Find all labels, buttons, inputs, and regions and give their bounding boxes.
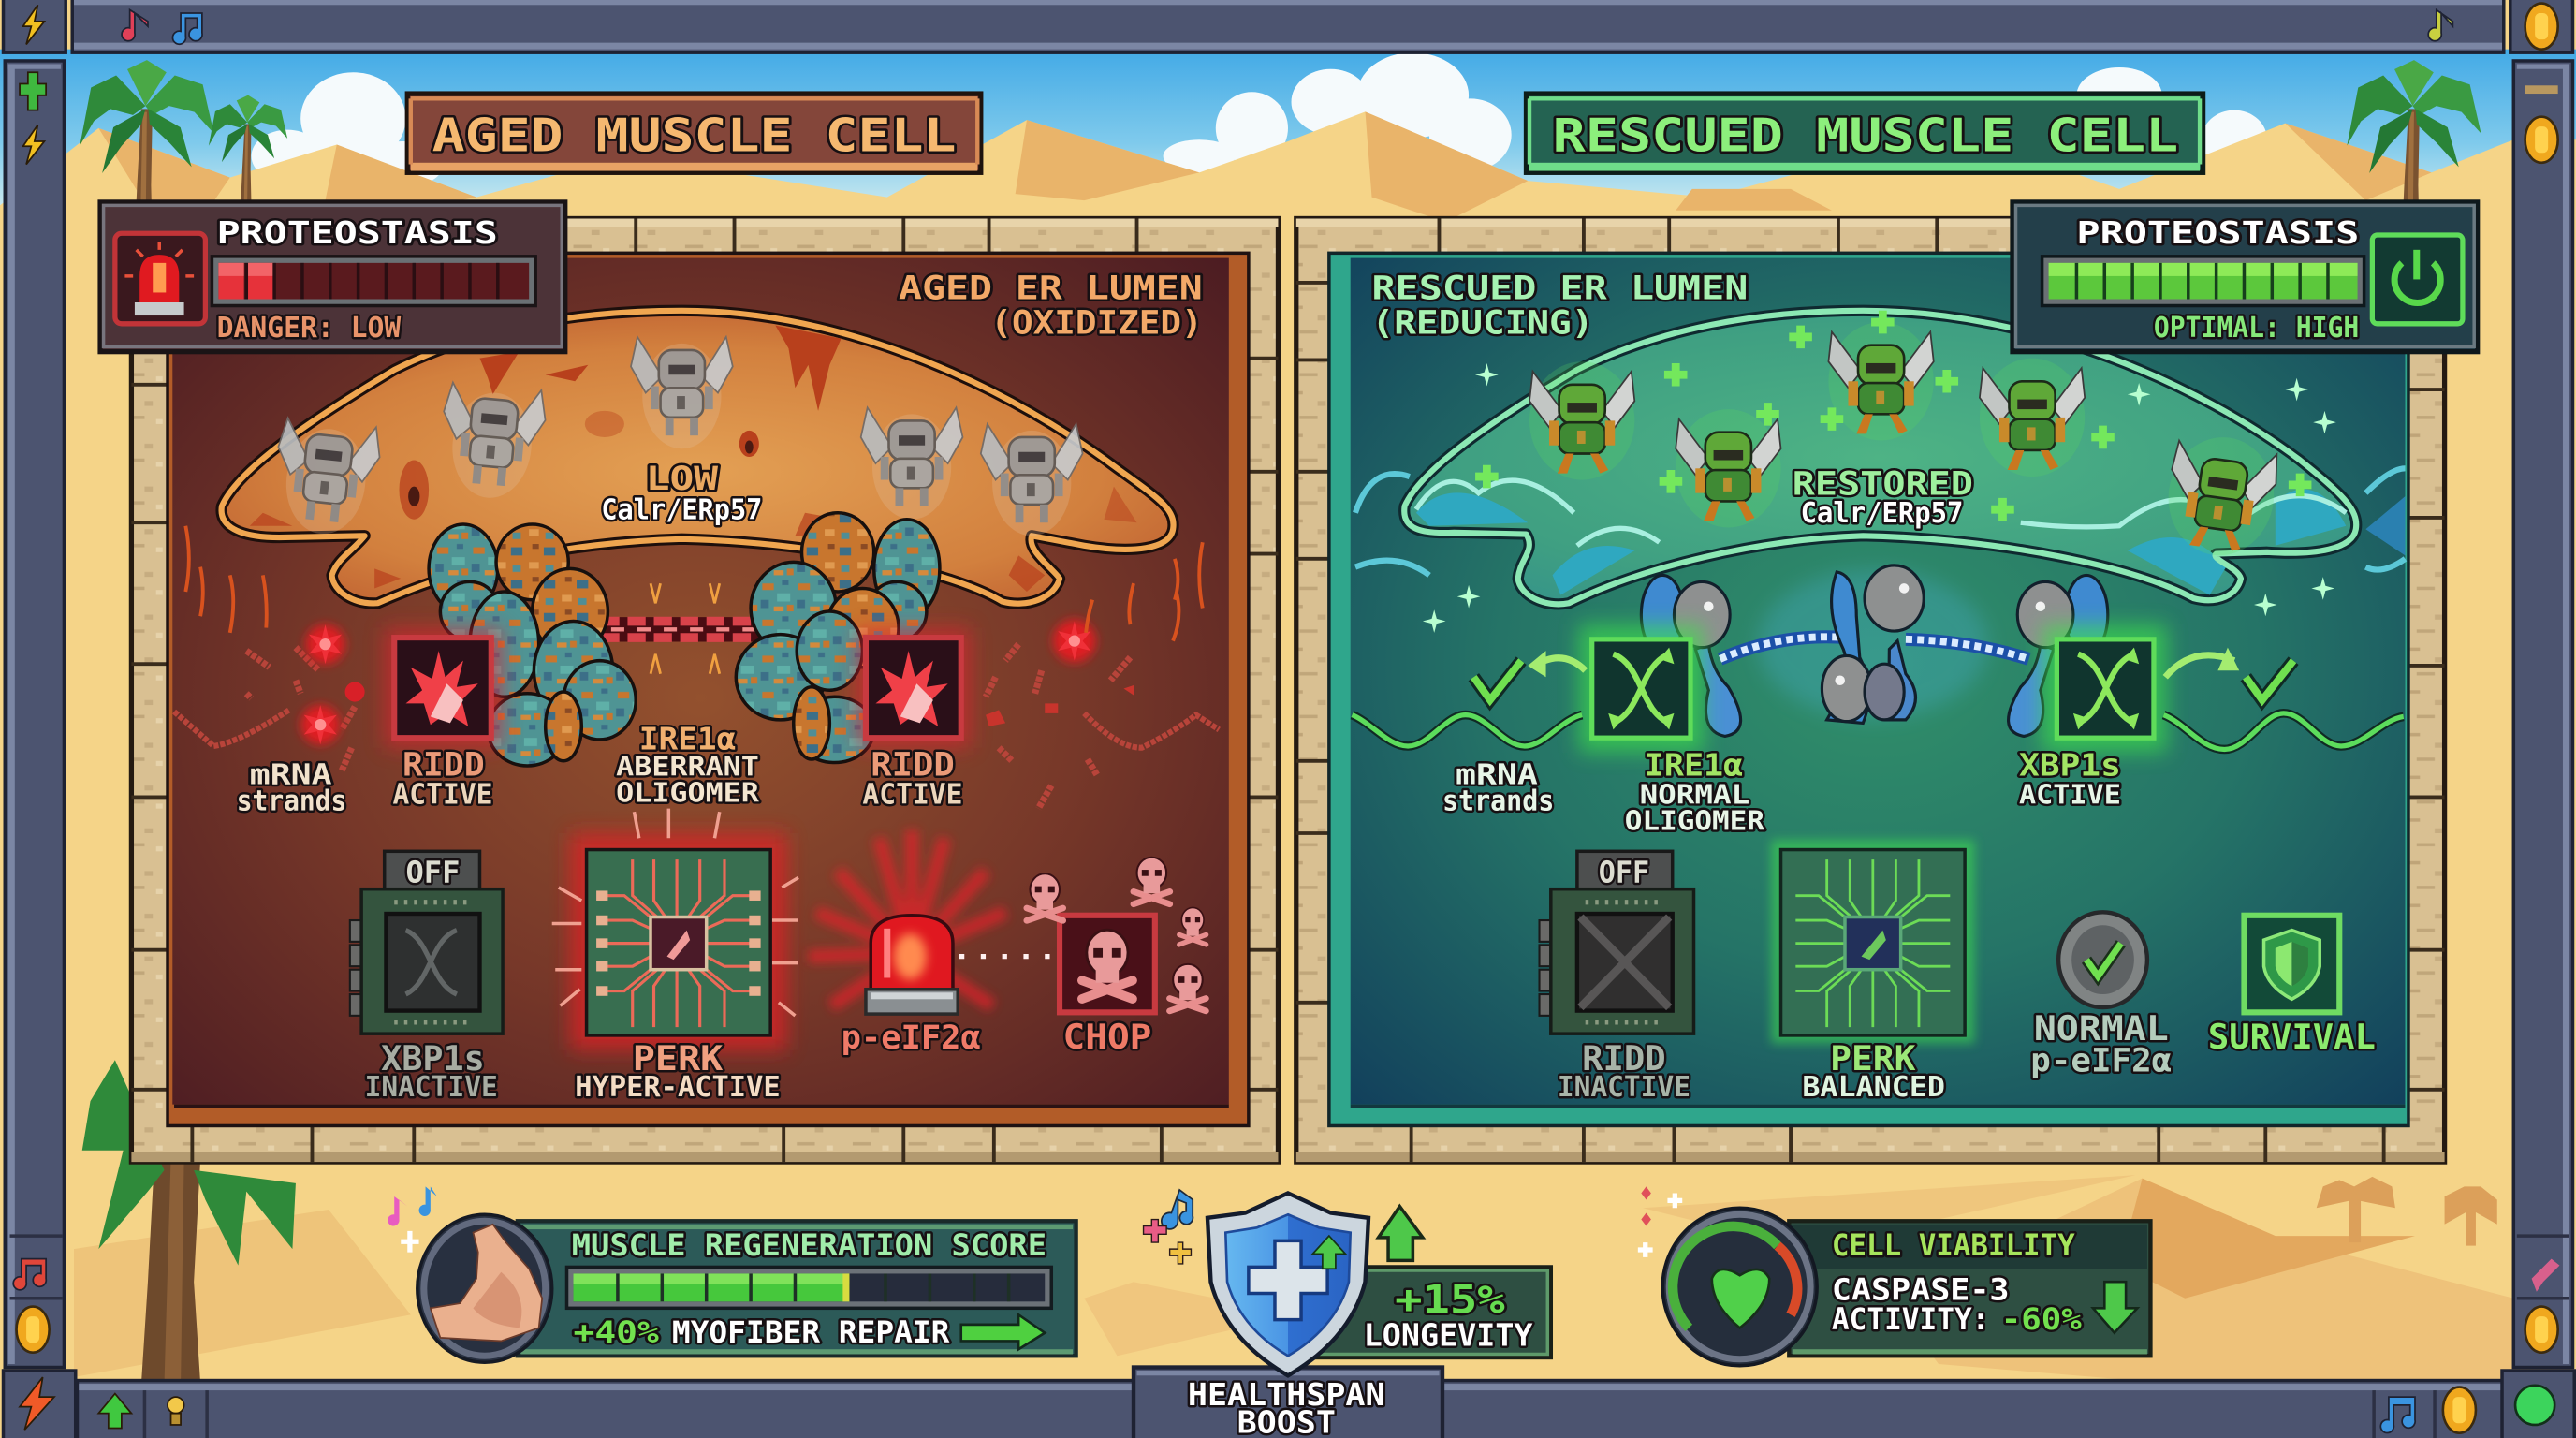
- label: caspase-3 activity: -60%: [2001, 1303, 2082, 1337]
- label: XBP1s active: [2019, 747, 2121, 810]
- label: RIDD inactive: [1558, 1038, 1690, 1104]
- label: low Calr/ERp57: LOW: [646, 460, 719, 498]
- palm silhouettes: bottom right: [2317, 1177, 2497, 1246]
- diagram: aged ER lumen dome: [222, 311, 1174, 604]
- oligomer: right aggregate: [736, 513, 940, 763]
- palm tree: top left: [80, 60, 214, 246]
- label: RIDD active left: [392, 746, 493, 811]
- chain: linking aberrant oligomers: [598, 583, 768, 674]
- icon: p-eIF2a alarm: [809, 829, 1055, 1014]
- label: mRNA strands aged: [237, 758, 346, 817]
- label: RIDD active left: ACTIVE: [392, 778, 493, 811]
- label: rescued ER lumen: RESCUED ER LUMEN: [1372, 269, 1748, 307]
- label: mRNA strands rescued: strands: [1442, 785, 1554, 817]
- label: PERK balanced: [1802, 1038, 1945, 1104]
- diagram: rescued ER lumen dome: [1355, 311, 2405, 604]
- label: IRE1a normal oligomer: IRE1α: [1645, 747, 1743, 784]
- label: optimal high: OPTIMAL: HIGH: [2154, 312, 2359, 345]
- icon: health shield: [1208, 1193, 1368, 1375]
- palm tree: top right: [2347, 60, 2481, 246]
- label: aged ER lumen: (OXIDIZED): [990, 303, 1203, 342]
- label: survival: SURVIVAL: [2208, 1017, 2376, 1057]
- arrow: repair: [961, 1314, 1045, 1349]
- gauge: regeneration bar: [567, 1267, 1051, 1308]
- mRNA strands: fragmented right: [986, 620, 1219, 809]
- label: XBP1s active: XBP1s: [2019, 747, 2121, 784]
- mRNA strands: fragmented left: [174, 624, 365, 770]
- label: rescued ER lumen: [1372, 269, 1748, 342]
- label: IRE1a normal oligomer: [1625, 747, 1764, 836]
- frame: bottom bar: [77, 1381, 2506, 1438]
- palm tree: bottom left: [82, 1060, 296, 1384]
- frame: corner bottom right: [2502, 1371, 2574, 1438]
- chip: XBP1s inactive: [350, 851, 503, 1034]
- panel: proteostasis rescued gauge: [2012, 202, 2478, 352]
- panel: rescued muscle cell stone frame: [1296, 218, 2445, 1162]
- label: caspase-3 activity: CASPASE-3: [1832, 1274, 2009, 1308]
- title: rescued muscle cell: [1526, 94, 2203, 172]
- label: proteostasis: PROTEOSTASIS: [217, 214, 498, 251]
- label: low Calr/ERp57: Calr/ERp57: [601, 494, 762, 527]
- label: caspase-3 activity: ACTIVITY:: [1832, 1303, 1989, 1337]
- label: PERK hyper-active: HYPER-ACTIVE: [575, 1071, 781, 1104]
- gauge: 2 of 11 red: [212, 257, 535, 306]
- label: cell viability: CELL VIABILITY: [1832, 1229, 2075, 1263]
- label: IRE1a aberrant oligomer: [616, 720, 759, 809]
- icon: viability heart gauge: [1662, 1208, 1817, 1366]
- panel: cell viability: [1789, 1221, 2150, 1356]
- label: normal p-eIF2a: NORMAL: [2034, 1008, 2169, 1049]
- chip: RIDD inactive: [1540, 851, 1694, 1034]
- label: IRE1a normal oligomer: OLIGOMER: [1625, 805, 1764, 836]
- icon: muscle badge: [417, 1214, 552, 1362]
- icon: normal p-eIF2a check: [2058, 912, 2147, 1007]
- arrow: longevity up: [1379, 1206, 1423, 1260]
- diagram: IRE1a normal oligomer: [1641, 565, 2108, 736]
- label: muscle regeneration score: MUSCLE REGENERATION SCORE: [572, 1229, 1046, 1263]
- label: RIDD inactive: RIDD: [1582, 1038, 1666, 1078]
- label: RIDD active left: RIDD: [402, 746, 485, 785]
- robots: inactive grey chaperones: [270, 337, 1083, 539]
- frame: corner bottom left: [4, 1371, 76, 1438]
- title: rescued muscle cell: RESCUED MUSCLE CELL: [1553, 108, 2178, 163]
- label: XBP1s active: ACTIVE: [2019, 779, 2121, 810]
- frame: top bar: [72, 0, 2504, 52]
- robots: active green chaperones: [1530, 322, 2281, 563]
- frame: right column: [2513, 61, 2572, 1368]
- label: XBP1s inactive: INACTIVE: [365, 1071, 498, 1104]
- icon: IRE1a active splice: [1579, 624, 1704, 753]
- label: XBP1s inactive: [365, 1038, 498, 1104]
- panel: longevity: [1314, 1267, 1551, 1357]
- frame: corner top left: [4, 0, 66, 52]
- frame: left column: [5, 61, 64, 1368]
- label: longevity: LONGEVITY: [1364, 1317, 1533, 1354]
- label: PERK balanced: PERK: [1830, 1038, 1916, 1078]
- icon: viability sparkles: [1638, 1186, 1682, 1257]
- chip: RIDD inactive: OFF: [1599, 857, 1649, 890]
- label: aged ER lumen: [899, 269, 1203, 342]
- arrow: caspase down: [2093, 1282, 2137, 1333]
- label: proteostasis: PROTEOSTASIS: [2076, 214, 2359, 251]
- icon: red alarm: [115, 233, 205, 324]
- icon: survival shield: [2244, 916, 2339, 1012]
- panel: muscle regeneration score: [518, 1221, 1076, 1356]
- label: RIDD inactive: INACTIVE: [1558, 1071, 1690, 1104]
- title: aged muscle cell: [407, 94, 981, 172]
- label: RIDD active right: RIDD: [871, 746, 955, 785]
- icon: CHOP skull and skulls: [1027, 858, 1207, 1012]
- label: restored Calr/ERp57: Calr/ERp57: [1801, 497, 1963, 530]
- label: RIDD active right: ACTIVE: [862, 778, 962, 811]
- icon: XBP1s active splice: [2042, 624, 2167, 753]
- label: RIDD active right: [862, 746, 962, 811]
- label: plus 15 percent: +15%: [1395, 1277, 1505, 1323]
- label: PERK balanced: BALANCED: [1802, 1071, 1945, 1104]
- frame icons: lightning and plus: [20, 5, 184, 1430]
- label: PERK hyper-active: PERK: [633, 1038, 724, 1078]
- label: restored Calr/ERp57: RESTORED: [1793, 464, 1973, 503]
- chip: PERK balanced: [1771, 840, 1975, 1044]
- label: danger low: DANGER: LOW: [217, 312, 401, 345]
- label: mRNA strands rescued: mRNA: [1456, 758, 1538, 791]
- label: IRE1a aberrant oligomer: ABERRANT: [616, 752, 759, 783]
- icon: floating notes and plus centre: [1144, 1190, 1193, 1264]
- label: IRE1a normal oligomer: NORMAL: [1640, 779, 1749, 810]
- palm tree: top left small: [209, 95, 287, 205]
- icon: RIDD active right: [856, 628, 971, 748]
- label: plus 40 percent myofiber repair: MYOFIBER REPAIR: [672, 1316, 950, 1350]
- label: caspase-3 activity: [1832, 1274, 2082, 1337]
- label: restored Calr/ERp57: [1793, 464, 1973, 530]
- label: mRNA strands aged: strands: [237, 785, 346, 817]
- tab: healthspan boost: HEALTHSPAN: [1188, 1376, 1385, 1413]
- panel: proteostasis aged gauge: [100, 202, 565, 352]
- gauge: 11 of 11 green: [2042, 257, 2364, 306]
- label: normal p-eIF2a: [2030, 1008, 2172, 1080]
- oligomer: left aggregate: [429, 524, 636, 766]
- sparkles: rescued lumen: [1423, 311, 2336, 633]
- label: XBP1s inactive: XBP1s: [381, 1038, 485, 1078]
- label: rescued ER lumen: (REDUCING): [1372, 303, 1593, 342]
- mRNA wave and checks: rescued: [1352, 648, 2404, 749]
- label: p-eIF2a aged: p-eIF2α: [842, 1019, 981, 1057]
- label: plus 40 percent myofiber repair: +40%: [574, 1316, 659, 1350]
- heat streaks: aged panel: [185, 526, 1203, 641]
- frame: corner top right: [2510, 0, 2572, 52]
- chip: XBP1s inactive: OFF: [406, 857, 460, 890]
- label: low Calr/ERp57: [601, 460, 762, 527]
- label: PERK hyper-active: [575, 1038, 781, 1104]
- label: IRE1a aberrant oligomer: OLIGOMER: [616, 778, 759, 809]
- panel: aged muscle cell stone frame: [131, 218, 1278, 1162]
- label: mRNA strands rescued: [1442, 758, 1554, 817]
- title: aged muscle cell: AGED MUSCLE CELL: [432, 108, 956, 163]
- tab: healthspan boost: [1134, 1368, 1442, 1438]
- label: CHOP: CHOP: [1063, 1017, 1151, 1057]
- label: mRNA strands aged: mRNA: [250, 758, 332, 791]
- icon: power button: [2372, 235, 2463, 324]
- label: aged ER lumen: AGED ER LUMEN: [899, 269, 1203, 307]
- icon: floating notes left: [388, 1186, 437, 1253]
- chip: PERK hyper-active: [552, 809, 798, 1050]
- label: normal p-eIF2a: p-eIF2α: [2030, 1042, 2172, 1080]
- icon: RIDD active left: [385, 628, 503, 748]
- label: IRE1a aberrant oligomer: IRE1α: [639, 720, 736, 756]
